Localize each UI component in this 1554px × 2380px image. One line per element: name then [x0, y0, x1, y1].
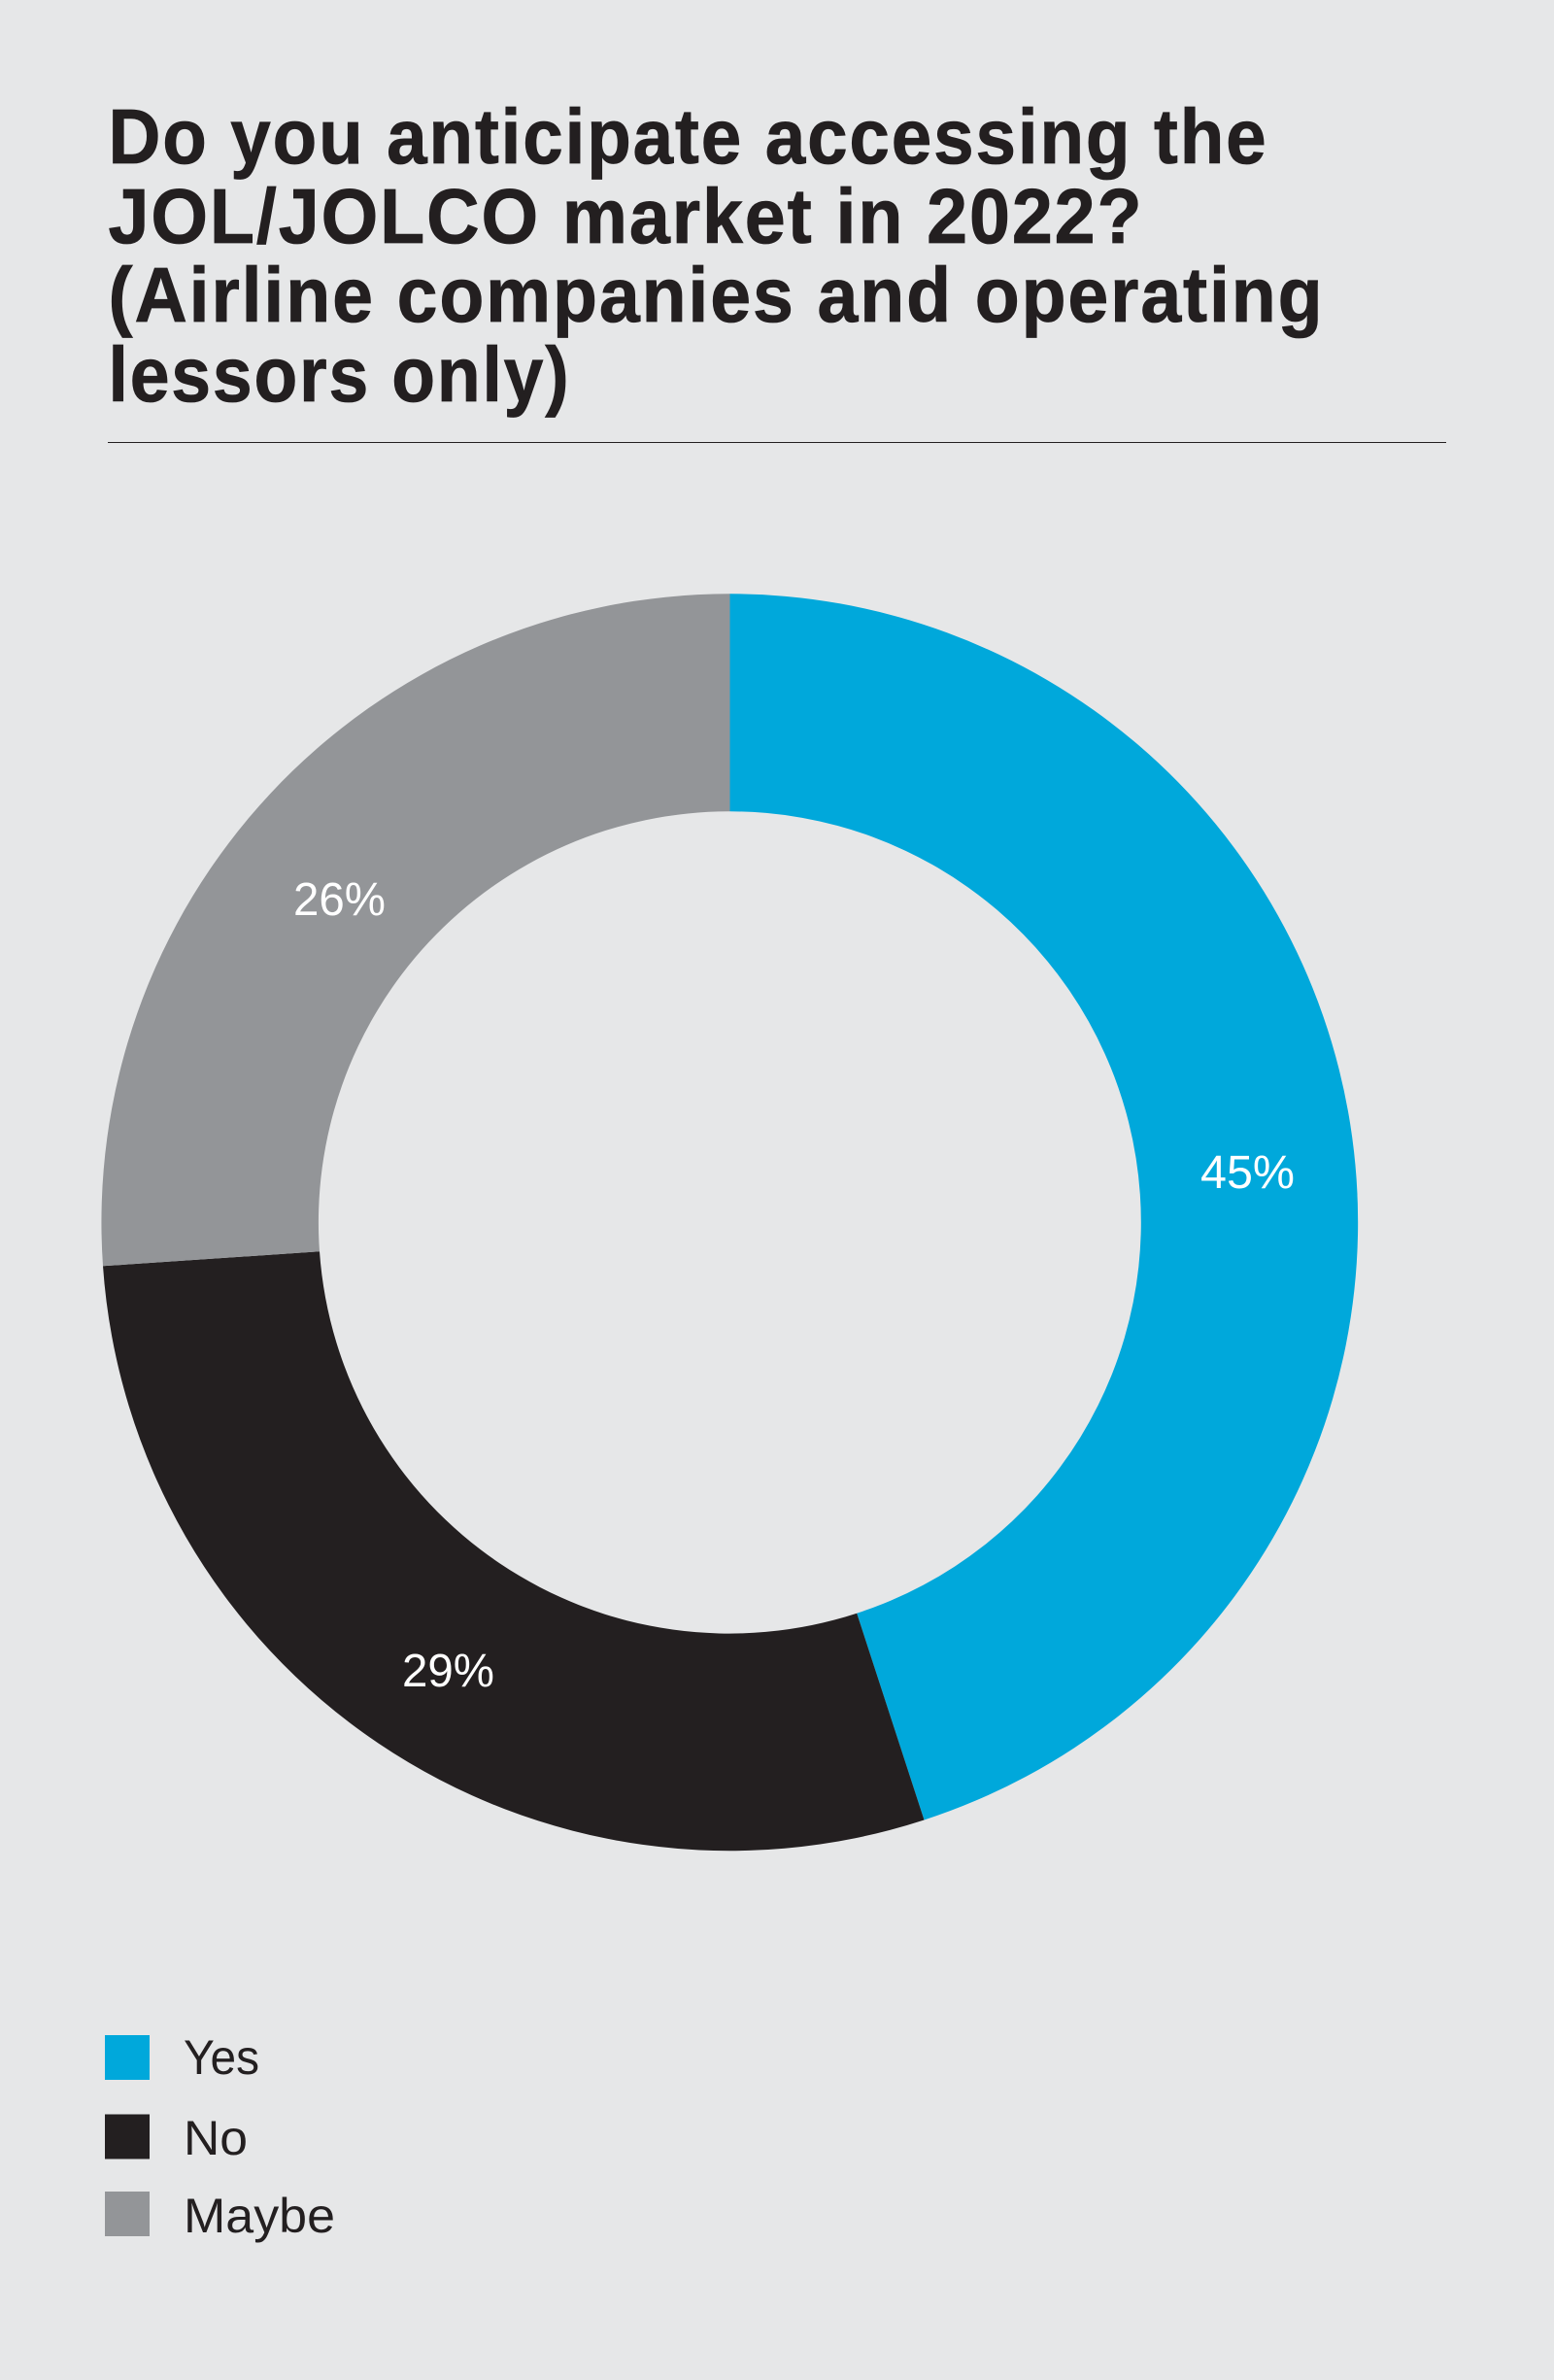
legend [105, 2030, 335, 2243]
donut chart [101, 594, 1358, 1851]
legend item: Maybe [105, 2189, 335, 2243]
label: 29%: 29% [402, 1646, 494, 1697]
segment: No 29% [103, 1251, 925, 1851]
title: Do you anticipate accessing the [109, 93, 1268, 180]
legend item: Maybe: Maybe [184, 2189, 335, 2243]
label: 26%: 26% [293, 874, 386, 926]
segment: Maybe 26% [101, 594, 730, 1266]
title: JOL/JOLCO market in 2022? [109, 173, 1144, 259]
title [109, 93, 1325, 418]
title: lessors only) [109, 331, 571, 418]
legend item: No: No [184, 2111, 248, 2165]
legend item: Yes [105, 2030, 259, 2085]
title: (Airline companies and operating [109, 252, 1325, 338]
legend item: No [105, 2111, 248, 2165]
label: 45%: 45% [1200, 1147, 1295, 1199]
segment: Yes 45% [730, 594, 1358, 1819]
legend item: Yes: Yes [184, 2030, 259, 2085]
